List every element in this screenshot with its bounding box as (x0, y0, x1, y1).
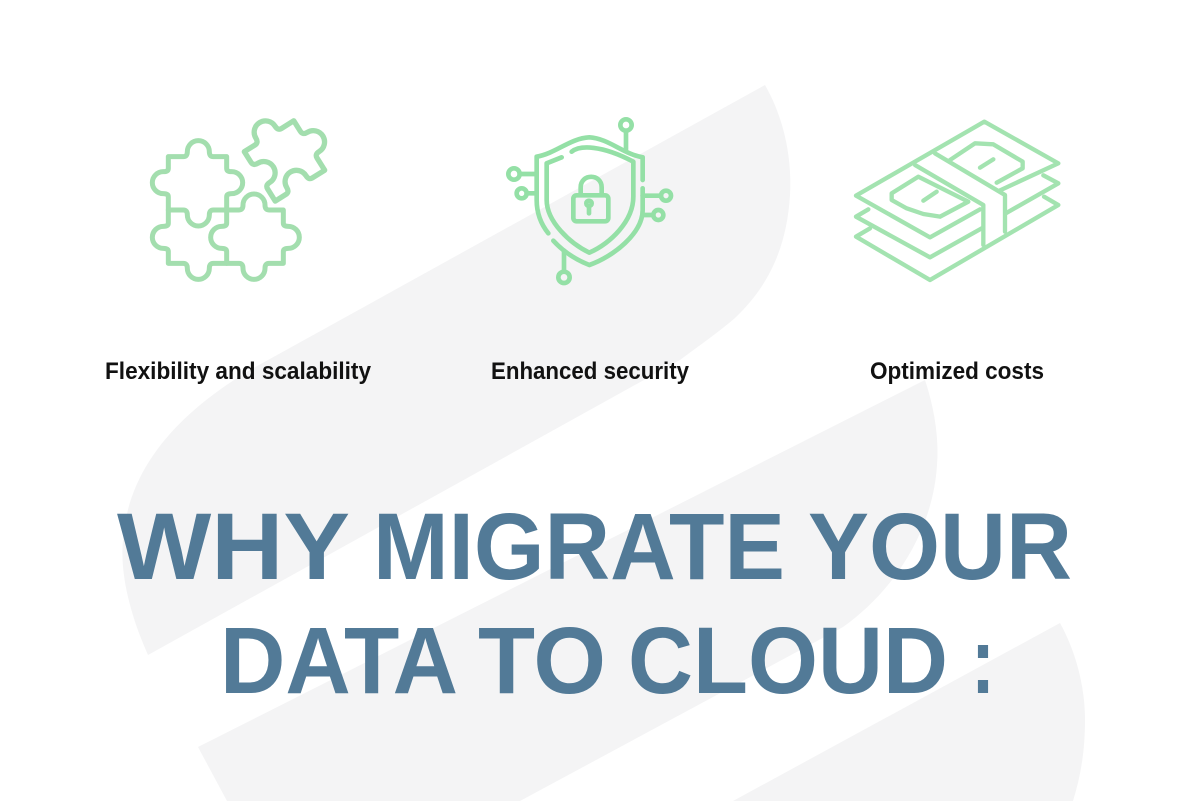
title: WHY (117, 494, 350, 600)
circuit nodes (508, 119, 671, 283)
title: MIGRATE (373, 494, 785, 600)
icon: puzzle pieces (152, 98, 339, 279)
title: CLOUD (628, 608, 948, 714)
title: DATA (220, 608, 458, 714)
label: Flexibility and scalability: Flexibility and scalability (105, 358, 372, 385)
title: YOUR (808, 494, 1072, 600)
icon: security shield with lock (508, 119, 671, 283)
title: TO (478, 608, 606, 714)
label: Optimized costs: Optimized costs (870, 358, 1044, 385)
padlock (573, 177, 608, 221)
background swoosh shapes (122, 85, 1085, 801)
inner shield (547, 148, 633, 253)
title (117, 494, 1072, 714)
icon: stack of banknotes (856, 122, 1058, 280)
title: : (971, 608, 995, 714)
label: Enhanced security: Enhanced security (491, 358, 690, 385)
outer shield (537, 137, 643, 265)
